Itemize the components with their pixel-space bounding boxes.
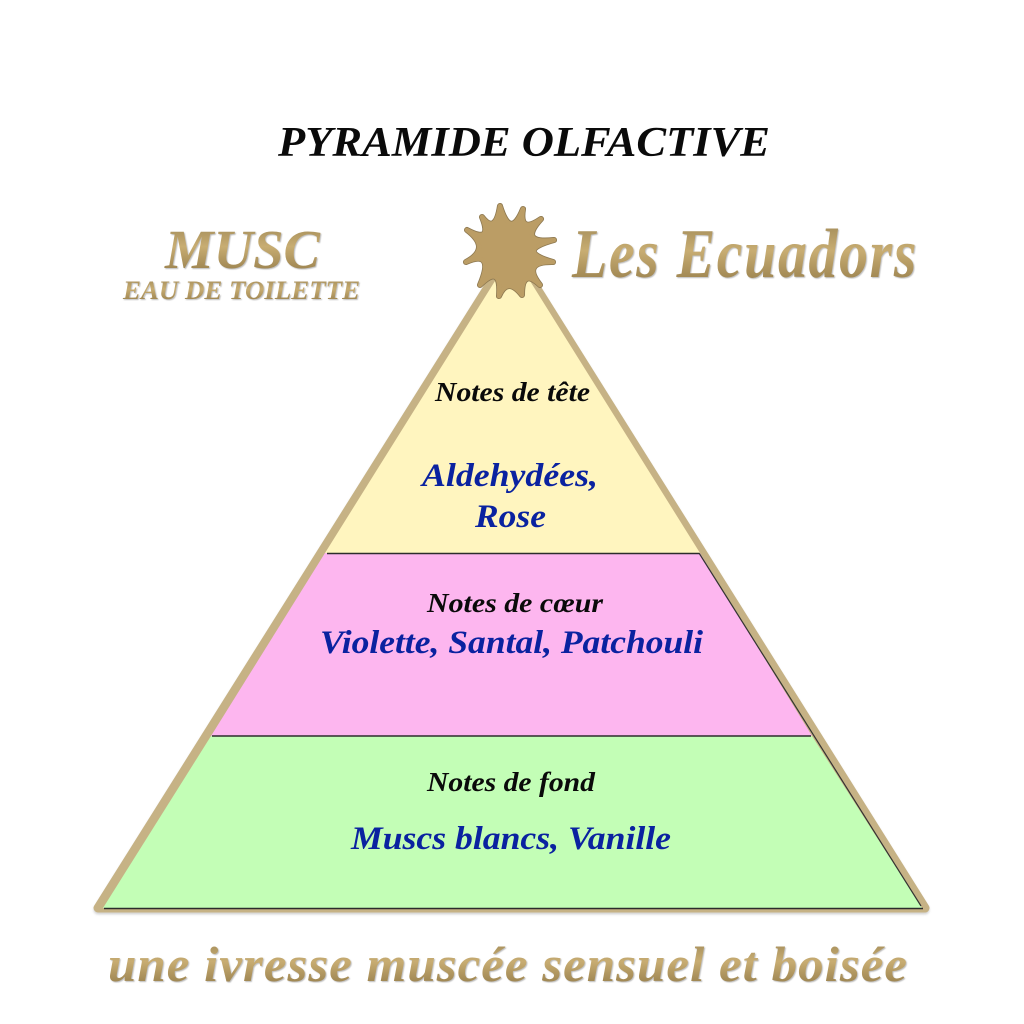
product name: MUSC xyxy=(164,219,321,280)
product type: EAU DE TOILETTE xyxy=(122,276,360,305)
ingredients: top notes: Rose xyxy=(474,499,546,535)
label: heart notes: Notes de cœur xyxy=(426,588,604,618)
pyramid frame xyxy=(98,249,925,908)
tier: base notes xyxy=(103,736,922,908)
tier: top notes xyxy=(325,253,700,553)
ingredients: base notes: Muscs blancs, Vanille xyxy=(350,821,671,857)
label: base notes: Notes de fond xyxy=(426,767,596,797)
ingredients: heart notes: Violette, Santal, Patchouli xyxy=(320,625,704,661)
ingredients: top notes xyxy=(420,458,598,535)
pyramid xyxy=(98,249,925,908)
title: PYRAMIDE OLFACTIVE xyxy=(277,120,770,166)
tier: heart notes xyxy=(211,553,812,736)
brand name: Les Ecuadors xyxy=(571,216,918,293)
tagline: une ivresse muscée sensuel et boisée xyxy=(108,936,908,992)
ingredients: top notes: Aldehydées, xyxy=(420,458,598,494)
label: top notes: Notes de tête xyxy=(434,377,590,407)
icon: sun xyxy=(466,206,554,296)
